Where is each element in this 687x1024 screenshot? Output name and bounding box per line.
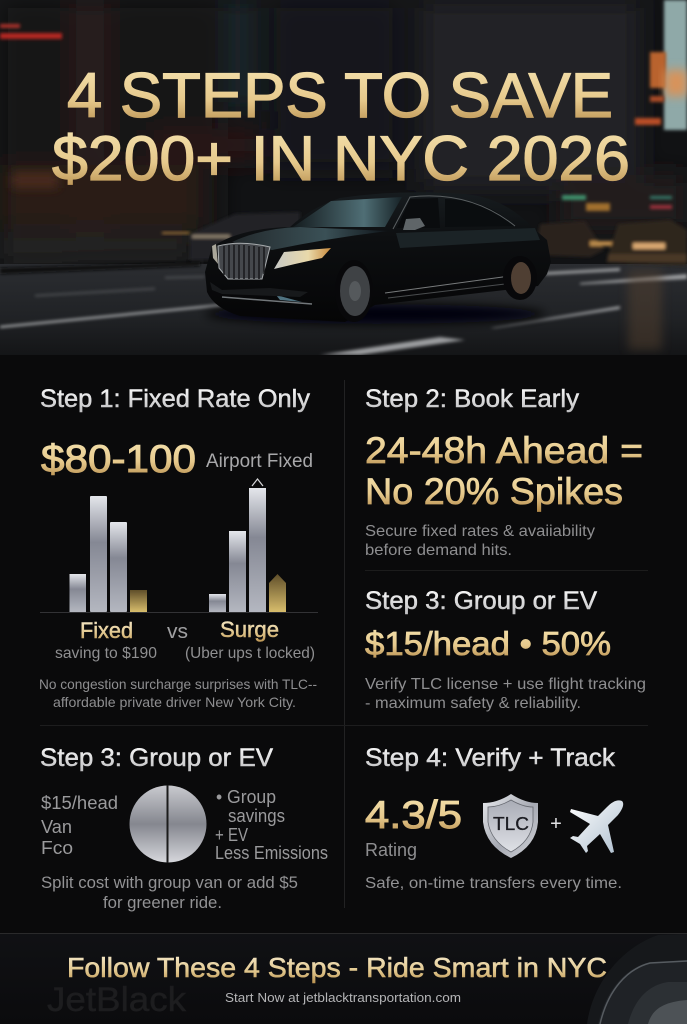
label: surge: Surge bbox=[220, 617, 279, 642]
side mirror bbox=[403, 218, 425, 230]
panel: step 3 left bbox=[40, 744, 328, 912]
bar chart: fixed vs surge bbox=[40, 479, 318, 613]
body highlights bbox=[396, 228, 540, 248]
note: uber: (Uber ups t locked) bbox=[185, 645, 315, 662]
panel: step 1 bbox=[39, 385, 318, 710]
title bbox=[52, 61, 630, 194]
label: rating: Rating bbox=[365, 840, 417, 860]
headlights bbox=[274, 248, 331, 269]
description: split cost: for greener ride. bbox=[103, 893, 222, 912]
sidewalk bbox=[0, 262, 200, 274]
windshield bbox=[293, 197, 402, 227]
description: step 3 right: - maximum safety & reliability. bbox=[365, 695, 581, 712]
description: step 1: affordable private driver New York City. bbox=[53, 694, 296, 710]
website link text: Start Now at jetblacktransportation.com bbox=[225, 990, 461, 1005]
labels: group and ev benefits bbox=[215, 787, 328, 863]
icon: TLC shield bbox=[483, 794, 538, 858]
watermark: JetBlack: JetBlack bbox=[47, 981, 187, 1019]
road markings bbox=[0, 268, 687, 355]
call to action: Follow These 4 Steps - Ride Smart in NYC bbox=[67, 952, 607, 983]
panel: hero street photo bbox=[0, 0, 687, 355]
panel: step 3 right bbox=[365, 587, 646, 712]
plus sign: + bbox=[550, 813, 562, 835]
stat: book ahead: 24-48h Ahead = bbox=[365, 430, 643, 471]
description: step 2 bbox=[365, 523, 595, 559]
stat: book ahead: No 20% Spikes bbox=[365, 471, 623, 512]
description: step 1 bbox=[39, 676, 317, 710]
front wheel bbox=[340, 266, 370, 322]
description: step 3 right bbox=[365, 676, 646, 712]
side windows bbox=[400, 198, 440, 222]
description: step 2: before demand hits. bbox=[365, 542, 512, 559]
label: airport fixed: Airport Fixed bbox=[206, 451, 313, 472]
icon: split disc bbox=[130, 785, 206, 863]
icon: TLC shield: TLC bbox=[493, 814, 529, 834]
bright sky at right edge bbox=[664, 0, 687, 130]
rear wheel bbox=[503, 262, 536, 300]
neon and street lights bbox=[0, 24, 687, 234]
reflected light on road bbox=[628, 270, 662, 350]
labels: group and ev benefits: + EV bbox=[215, 825, 248, 845]
car body bbox=[205, 192, 551, 322]
heading: step 1: Step 1: Fixed Rate Only bbox=[40, 385, 311, 413]
labels: group and ev benefits: • Group bbox=[216, 787, 276, 807]
description: step 1: No congestion surcharge surprises with TLC-- bbox=[39, 676, 317, 692]
panel: step 2 bbox=[365, 385, 648, 571]
heading: step 2: Step 2: Book Early bbox=[365, 385, 580, 413]
stat: per head: $15/head • 50% bbox=[365, 625, 611, 662]
panel: footer bbox=[0, 933, 687, 1024]
labels: van cost bbox=[41, 793, 118, 858]
title: $200+ IN NYC 2026 bbox=[52, 124, 630, 194]
heading: step 3 right: Step 3: Group or EV bbox=[365, 587, 597, 615]
label: vs: vs bbox=[167, 621, 188, 643]
labels: group and ev benefits: Less Emissions bbox=[215, 843, 328, 863]
labels: van cost: Fco bbox=[41, 838, 73, 858]
wheel graphic bbox=[587, 934, 687, 1024]
stat: rating: 4.3/5 bbox=[365, 794, 462, 837]
stat: airport price: $80-100 bbox=[41, 438, 196, 481]
description: step 4: Safe, on-time transfers every time. bbox=[365, 875, 622, 892]
background cars bbox=[190, 212, 687, 266]
labels: van cost: Van bbox=[41, 817, 72, 837]
labels: van cost: $15/head bbox=[41, 793, 118, 813]
heading: step 4: Step 4: Verify + Track bbox=[365, 744, 616, 772]
description: step 2: Secure fixed rates & avaiiability bbox=[365, 523, 595, 540]
road bbox=[0, 264, 687, 342]
grille bbox=[218, 243, 270, 279]
label: fixed: Fixed bbox=[80, 618, 133, 643]
blurred city buildings bbox=[0, 0, 687, 270]
car bbox=[205, 192, 551, 324]
description: split cost bbox=[41, 873, 298, 912]
panel: steps background bbox=[0, 355, 687, 933]
note: saving: saving to $190 bbox=[55, 645, 157, 662]
description: split cost: Split cost with group van or add $5 bbox=[41, 873, 298, 892]
icon: airplane bbox=[570, 800, 623, 853]
hood reflection bbox=[232, 227, 388, 250]
description: step 3 right: Verify TLC license + use flight tracking bbox=[365, 676, 646, 693]
heading: step 3 left: Step 3: Group or EV bbox=[40, 744, 273, 772]
labels: group and ev benefits: savings bbox=[228, 806, 285, 826]
stat: book ahead bbox=[365, 430, 643, 512]
title: 4 STEPS TO SAVE bbox=[67, 61, 613, 131]
panel: step 4 bbox=[365, 744, 623, 892]
